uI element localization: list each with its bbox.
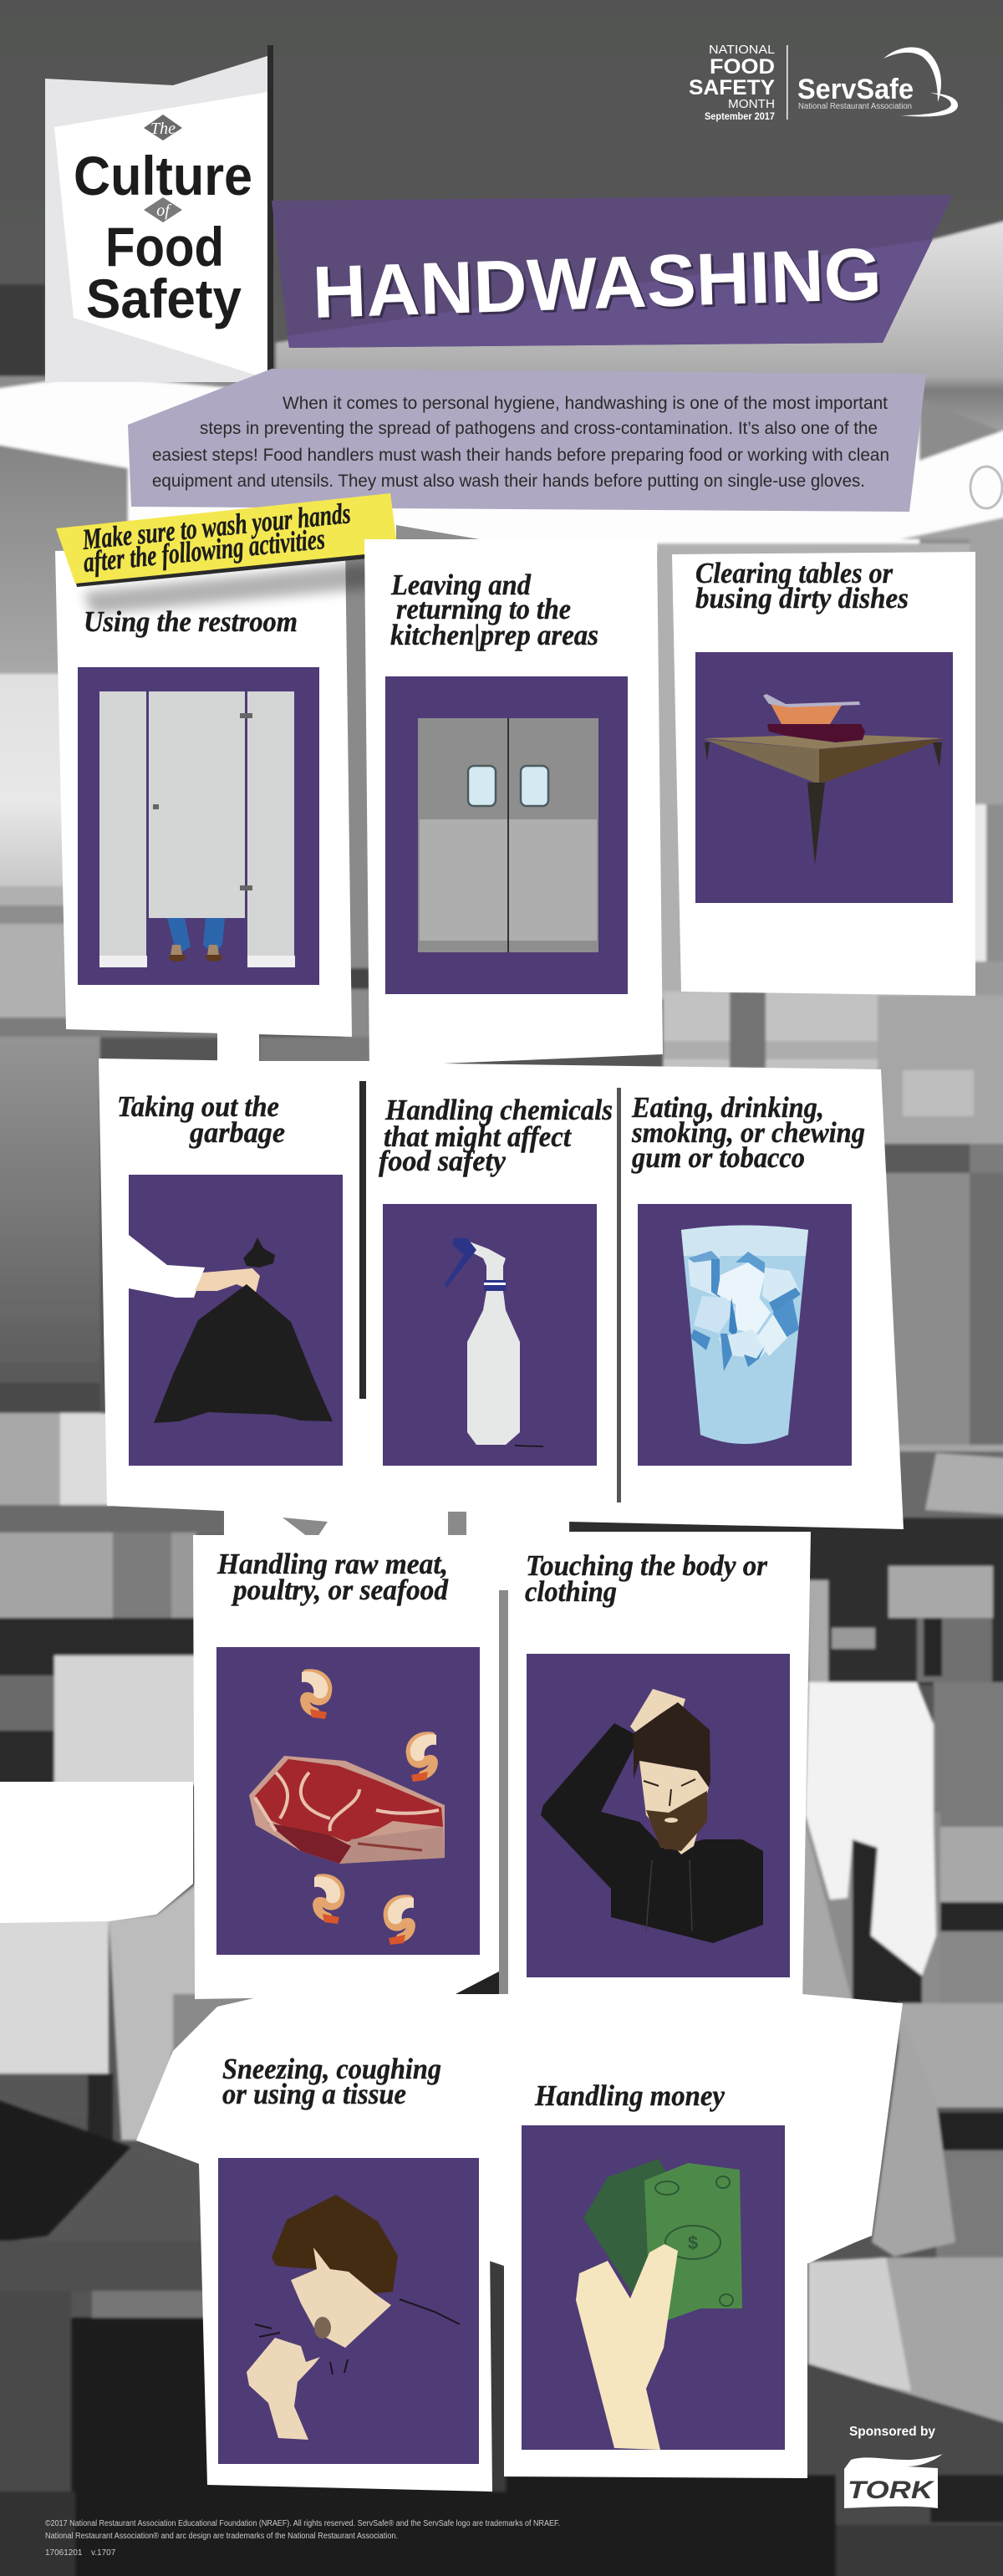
diamond: of [144, 197, 182, 222]
card title: kitchen|prep areas [390, 619, 598, 651]
card title: returning to the [396, 593, 571, 625]
card title: garbage [189, 1116, 285, 1149]
logo: National Food Safety Month / ServSafe: ServSafe [797, 74, 914, 105]
card title: or using a tissue [222, 2078, 406, 2110]
illustration: chef scratching head [527, 1654, 790, 1977]
card title: Clearing tables or [695, 557, 893, 589]
illustration: swinging kitchen doors [385, 676, 628, 994]
right column [900, 514, 1003, 807]
banner: make sure to wash: Make sure to wash your hands [80, 497, 352, 556]
banner: handwashing [272, 195, 953, 348]
gap strip between row three cards [456, 1590, 508, 1994]
card: sneezing coughing [199, 2053, 492, 2492]
card: taking out the garbage [117, 1090, 343, 1466]
intro text panel: When it comes to personal hygiene, handwashing is one of the most important [283, 394, 888, 413]
card: clearing tables [672, 552, 975, 996]
illustration: hand holding cash: $ [688, 2232, 698, 2253]
card title: food safety [379, 1145, 506, 1177]
card: eating drinking smoking [631, 1091, 865, 1466]
left column [0, 442, 128, 674]
card title [525, 1549, 767, 1608]
card title [117, 1090, 285, 1149]
heading: culture: Culture [74, 145, 252, 207]
logo: National Food Safety Month / ServSafe: SAFETY [689, 76, 775, 99]
card title [216, 1548, 448, 1606]
card: handling money [504, 2079, 807, 2478]
card title [631, 1091, 865, 1174]
card: touching the body [499, 1532, 811, 2003]
culture of food safety sign [45, 45, 273, 387]
card title: poultry, or seafood [231, 1574, 448, 1606]
card title: Taking out the [117, 1090, 279, 1123]
heading: safety: Safety [86, 268, 242, 329]
card title: that might affect [384, 1120, 572, 1153]
diamond: The: The [150, 120, 176, 138]
sponsor: tork: Sponsored by [849, 2425, 935, 2439]
card title: smoking, or chewing [631, 1116, 865, 1149]
white panel: third row left card [193, 1535, 502, 1999]
logo: National Food Safety Month / ServSafe: FOOD [710, 55, 775, 79]
card title: clothing [525, 1575, 617, 1608]
card title: gum or tobacco [631, 1141, 805, 1174]
footer legal text: v.1707 [91, 2548, 116, 2558]
illustration: hand holding cash [522, 2125, 785, 2450]
card title: Using the restroom [84, 605, 298, 638]
heading: food: Food [105, 216, 224, 278]
banner: make sure to wash: after the following activities [82, 523, 326, 579]
card: handling raw meat [216, 1548, 480, 1955]
logo: National Food Safety Month / ServSafe: NATIONAL [709, 43, 775, 57]
card title [695, 557, 909, 615]
illustration: person sneezing [218, 2158, 479, 2464]
illustration: glass of ice water [638, 1204, 852, 1466]
card: leaving and returning [364, 539, 663, 1070]
illustration: spray bottle [383, 1204, 597, 1466]
central gaps [343, 518, 372, 1070]
illustration: raw steak and shrimp [216, 1647, 480, 1955]
banner: handwashing: HANDWASHING [311, 232, 883, 334]
banner: make sure to wash [56, 493, 406, 615]
card title [390, 569, 598, 651]
logo: National Food Safety Month / ServSafe [689, 43, 958, 122]
white paper backing: row connectors [0, 1024, 903, 2266]
sponsor: tork [844, 2425, 943, 2508]
card: using the restroom [55, 543, 352, 1037]
card title: Handling money [534, 2079, 725, 2112]
illustration: restroom stall [78, 667, 319, 985]
card title: Sneezing, coughing [222, 2053, 441, 2085]
card title: Leaving and [390, 569, 531, 601]
card title: Handling chemicals [384, 1094, 613, 1126]
footer legal text: National Restaurant Association® and arc design are trademarks of the National Restaurant Association. [45, 2532, 398, 2541]
intro text panel: equipment and utensils. They must also wash their hands before putting on single-use gloves. [152, 472, 865, 491]
illustration: table with dirty dishes [695, 652, 953, 903]
divider strokes between row two cards [359, 1081, 621, 1502]
footer legal text: 17061201 [45, 2548, 83, 2558]
card: handling chemicals [379, 1094, 613, 1466]
intro text panel [128, 369, 926, 512]
diamond: The [144, 115, 182, 140]
card title: busing dirty dishes [695, 582, 909, 615]
white panel: second row backing [99, 1058, 904, 1529]
intro text panel: steps in preventing the spread of pathogens and cross-contamination. It’s also one of the [200, 419, 878, 438]
illustration: hand with garbage bag [129, 1175, 343, 1466]
logo: National Food Safety Month / ServSafe: MONTH [728, 97, 775, 111]
intro text panel: easiest steps! Food handlers must wash their hands before preparing food or working with clean [152, 446, 889, 465]
card title [222, 2053, 441, 2110]
gray table-leg shapes behind row three [283, 1512, 466, 1537]
logo: National Food Safety Month / ServSafe: National Restaurant Association [798, 102, 912, 111]
footer legal text [45, 2519, 560, 2558]
diamond: of: of [156, 201, 171, 220]
banner: handwashing: HANDWASHING [313, 234, 885, 336]
card title: Handling raw meat, [216, 1548, 448, 1580]
card title: Eating, drinking, [631, 1091, 824, 1124]
logo: tork flag: TORK [848, 2477, 935, 2504]
card title [379, 1094, 613, 1177]
footer legal text: ©2017 National Restaurant Association Educational Foundation (NRAEF). All rights reserved. ServSafe® and the ServSafe logo are trademarks of NRAEF. [45, 2519, 560, 2528]
logo: National Food Safety Month / ServSafe: September 2017 [705, 110, 775, 122]
card title: Touching the body or [526, 1549, 767, 1582]
